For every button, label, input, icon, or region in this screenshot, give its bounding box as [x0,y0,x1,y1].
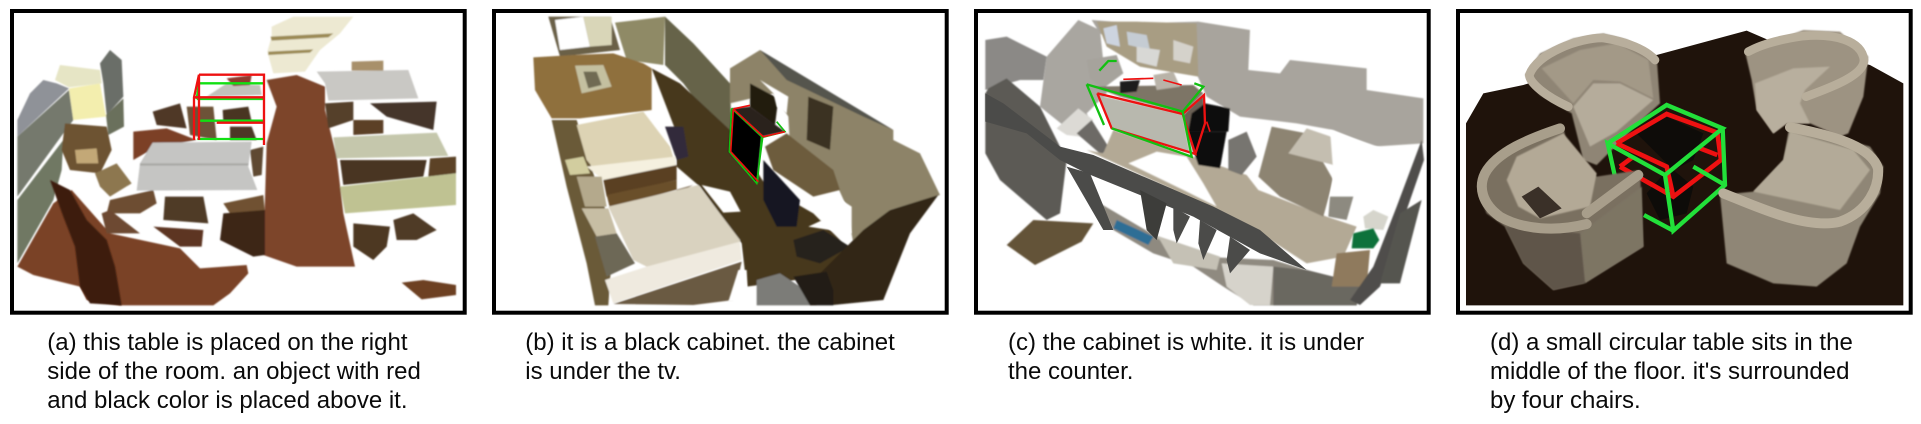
panel b scene: point cloud of bedroom [533,17,940,305]
panel c caption: the counter. [1008,358,1133,385]
panel d frame [1458,11,1911,313]
panel c: office room scene [976,11,1429,385]
panel a caption: side of the room. an object with red [47,358,421,385]
panel b frame [494,11,947,313]
table [1637,117,1703,220]
panel b caption: is under the tv. [525,358,681,385]
panel a: restaurant tables scene [12,11,465,414]
panel c caption: (c) the cabinet is white. it is under [1008,329,1364,356]
chair top-right [1745,30,1868,137]
panel a frame [12,11,465,313]
panel d caption: (d) a small circular table sits in the [1490,329,1853,356]
panel a caption: and black color is placed above it. [47,387,408,414]
panel b 3D bounding boxes [729,105,785,183]
bbox green [1608,105,1725,231]
panel d caption: by four chairs. [1490,387,1641,414]
panel a caption: (a) this table is placed on the right [47,329,408,356]
panel c frame [976,11,1429,313]
panel a 3D bounding boxes [194,75,264,145]
chair bottom-right [1720,123,1883,287]
bbox red [1617,114,1721,197]
panel d scene: armchairs around table [1466,30,1903,305]
chair top-left [1525,33,1660,165]
panel a scene: point cloud of dining room [17,17,456,305]
panel b: hotel bedroom scene [494,11,947,385]
panel d: four armchairs scene [1458,11,1911,414]
panel d caption: middle of the floor. it's surrounded [1490,358,1849,385]
panel c scene: point cloud of office [985,20,1424,305]
panel b caption: (b) it is a black cabinet. the cabinet [525,329,895,356]
panel c 3D bounding boxes [1087,61,1210,157]
chair bottom-left [1478,125,1643,290]
